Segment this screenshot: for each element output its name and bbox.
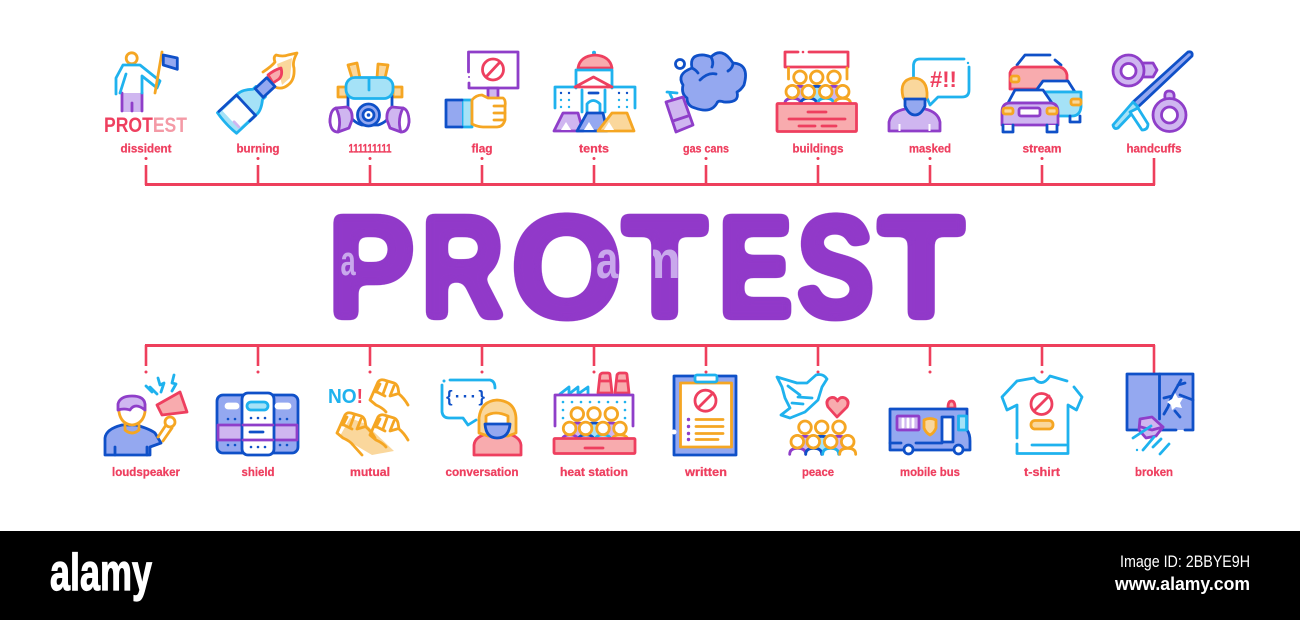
main title: PROTEST — [328, 186, 964, 348]
icon: masked person with speech bubble — [889, 59, 969, 131]
icon: heat station with crowd — [554, 373, 635, 454]
lower right fist — [370, 415, 408, 447]
footer bar — [0, 531, 1300, 620]
labels top row: masked — [909, 142, 951, 156]
watermark letters over title: a — [340, 237, 356, 284]
icon: conversation bubble with masked woman — [442, 380, 521, 455]
labels bottom row: mutual — [350, 466, 390, 479]
top connector timeline — [144, 157, 1155, 186]
icon: broken window with stone — [1127, 374, 1193, 454]
bubble code symbols: {···} — [446, 387, 485, 406]
labels bottom row: conversation — [446, 466, 518, 479]
main title: PROTEST: P — [328, 187, 414, 348]
upper fist — [370, 380, 408, 412]
labels bottom row: broken — [1135, 466, 1173, 479]
labels bottom row: heat station — [560, 466, 628, 479]
labels top row: stream — [1022, 142, 1062, 156]
footer image credit: Image ID: 2BBYE9H — [1120, 552, 1250, 571]
symbols in bubble: #!! — [930, 67, 957, 92]
labels top row: handcuffs — [1126, 142, 1182, 156]
footer image credit — [1114, 552, 1250, 594]
labels top row: dissident — [120, 142, 172, 156]
labels bottom row: peace — [802, 466, 835, 479]
footer logo: alamy — [50, 544, 152, 602]
labels bottom row: written — [684, 466, 727, 479]
main title: PROTEST: T — [878, 188, 964, 348]
main title: PROTEST: S — [796, 186, 874, 347]
icon: peace dove, heart and crowd — [777, 374, 856, 454]
icon: handcuffs and baton — [1113, 52, 1192, 132]
watermark letters over title — [341, 250, 678, 278]
footer image credit: www.alamy.com — [1114, 574, 1250, 594]
icon: NO and raised fists: NO! — [328, 386, 363, 408]
icon: stream of cars — [1002, 55, 1081, 132]
word PROTEST under figure: PROTEST — [104, 114, 187, 137]
main title: PROTEST: E — [718, 187, 793, 348]
icon: crowd at buildings with banner — [777, 51, 856, 132]
labels top row: buildings — [792, 142, 844, 156]
icon: gas mask — [330, 63, 409, 132]
icon: capitol building and tents — [554, 51, 635, 131]
crowd — [790, 421, 856, 454]
main title: PROTEST: R — [421, 186, 504, 347]
icon: mobile police bus — [890, 401, 970, 454]
labels bottom row: loudspeaker — [112, 466, 180, 479]
lower left fist — [337, 413, 375, 455]
labels top row: 111111111 — [348, 142, 392, 156]
main title: PROTEST: T — [622, 186, 707, 347]
icon: dissident with flag — [104, 52, 187, 137]
icon: riot shields — [217, 393, 298, 455]
labels bottom row: shield — [242, 466, 274, 479]
icon: person with loudspeaker — [105, 375, 187, 455]
icon: protest t-shirt — [1002, 376, 1082, 454]
watermark letters over title: m — [636, 230, 681, 289]
watermark letters over title: a — [596, 231, 619, 289]
labels top row: flag — [472, 142, 492, 156]
labels top row: gas cans — [683, 142, 729, 156]
icon: fist holding sign — [446, 52, 518, 127]
icon: molotov burning bottle — [217, 53, 297, 134]
labels bottom row: t-shirt — [1024, 466, 1060, 479]
labels bottom row — [112, 466, 1173, 479]
labels bottom row: mobile bus — [900, 466, 960, 479]
labels top row: tents — [579, 142, 609, 156]
bottom connector timeline — [144, 344, 1155, 374]
crowd — [785, 71, 851, 104]
icon: gas can with smoke cloud — [666, 53, 746, 132]
labels top row — [120, 142, 1182, 156]
labels top row: burning — [236, 142, 280, 156]
icon: written clipboard — [672, 375, 736, 455]
crowd — [562, 408, 628, 441]
icon: NO and raised fists — [328, 380, 408, 455]
main title: PROTEST: O — [512, 188, 622, 348]
